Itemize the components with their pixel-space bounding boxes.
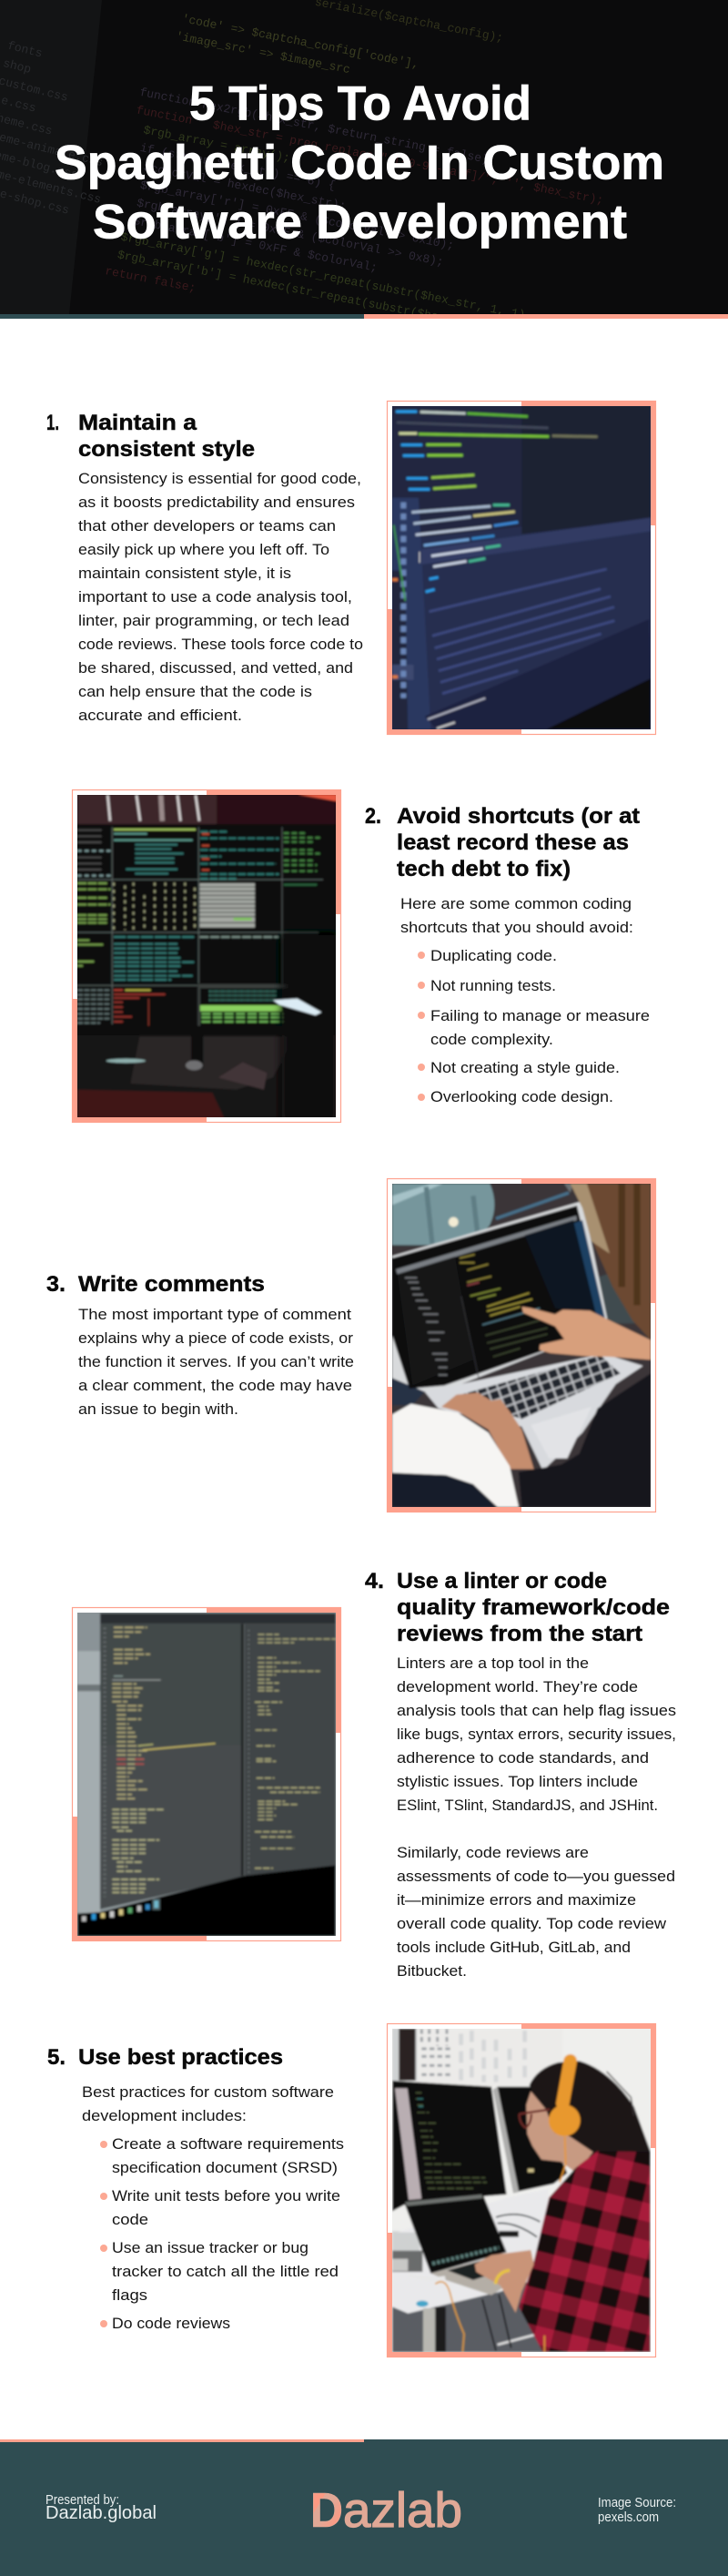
code screenshot background xyxy=(0,0,601,314)
body: tip 1: easily pick up where you left off. To xyxy=(78,541,329,558)
body: tip 4 paragraph 2: overall code quality. Top code review xyxy=(397,1915,667,1932)
presented by xyxy=(46,2493,157,2523)
code screenshot background: return false; xyxy=(104,264,197,295)
code screenshot background: fonts xyxy=(6,39,44,61)
body: tip 1: code reviews. These tools force code to xyxy=(78,636,363,653)
bullet list: tip 5: code xyxy=(112,2211,148,2228)
intro: tip 2: shortcuts that you should avoid: xyxy=(400,919,633,936)
bullet list: tip 2 xyxy=(418,947,650,1105)
code screenshot background: $colorVal = hexdec($hex_str); xyxy=(143,160,348,213)
header accent bar xyxy=(0,314,728,319)
body: tip 3: The most important type of comment xyxy=(78,1306,351,1323)
heading: tip 2 xyxy=(365,804,640,881)
body: tip 4 paragraph 1: analysis tools that can help flag issues xyxy=(397,1702,676,1719)
body: tip 1: accurate and efficient. xyxy=(78,707,242,724)
heading: tip 3: 3. xyxy=(46,1272,66,1297)
heading: tip 4: 4. xyxy=(365,1569,384,1593)
panel: tip 4 text xyxy=(365,1569,676,1980)
code screenshot background: 'code' => $captcha_config['code'], xyxy=(180,12,420,71)
heading: tip 1 xyxy=(46,411,255,462)
heading: tip 1: Maintain a xyxy=(78,411,197,435)
body: tip 3: a clear comment, the code may have xyxy=(78,1377,352,1394)
panel: tip 5 text xyxy=(47,2045,344,2332)
heading: tip 2: tech debt to fix) xyxy=(397,857,571,881)
image frame xyxy=(387,401,656,735)
code screenshot background: function hex2rgb($hex_str, $return_string = false) xyxy=(138,86,490,167)
bullet list: tip 2: Not running tests. xyxy=(430,977,556,994)
heading: tip 4: reviews from the start xyxy=(397,1622,642,1646)
heading: tip 4: quality framework/code xyxy=(397,1595,670,1620)
heading: tip 1: 1. xyxy=(46,411,59,435)
bullet list: tip 5: Do code reviews xyxy=(112,2315,230,2332)
bullet list: tip 5: tracker to catch all the little red xyxy=(112,2263,339,2280)
code screenshot background: if (strlen($hex_str) == 6) { xyxy=(139,141,337,192)
body: tip 1: that other developers or teams can xyxy=(78,517,336,535)
panel: tip 1 text xyxy=(46,411,363,724)
body: tip 3 xyxy=(78,1306,354,1418)
presented by: Presented by: xyxy=(46,2493,119,2508)
bullet list: tip 5: Use an issue tracker or bug xyxy=(112,2239,308,2256)
presented by: Dazlab.global xyxy=(46,2503,157,2523)
code screenshot background: $rgb_array = array(); xyxy=(142,123,291,165)
body: tip 4 paragraph 2: assessments of code to—you guessed xyxy=(397,1868,675,1885)
body: tip 4 paragraph 1: adherence to code standards, and xyxy=(397,1749,649,1767)
code screenshot background: $rgb_array['b'] = hexdec(str_repeat(substr($hex_str, 2, 1), 2)); xyxy=(116,248,565,348)
body: tip 3: the function it serves. If you can’t write xyxy=(78,1353,354,1370)
intro: tip 2: Here are some common coding xyxy=(400,895,632,912)
code screenshot background: function $hex_str = preg_replace("/[^0-9A-Fa-f]/", '', $hex_str); xyxy=(135,103,604,208)
body: tip 3: an issue to begin with. xyxy=(78,1400,238,1418)
body: tip 4 paragraph 2 xyxy=(397,1844,675,1980)
photo 3: people pointing at laptop xyxy=(385,1177,658,1512)
body: tip 1: can help ensure that the code is xyxy=(78,683,312,700)
bullet list: tip 5: specification document (SRSD) xyxy=(112,2159,338,2176)
intro: tip 5: Best practices for custom software xyxy=(82,2083,334,2101)
logo: Dazlab: D xyxy=(310,2483,343,2538)
code screenshot background: $rgb_array['r'] = 0xFF & ($colorVal >> 0x10); xyxy=(139,178,455,252)
body: tip 4 paragraph 1: development world. They’re code xyxy=(397,1678,638,1695)
image frame xyxy=(72,789,341,1123)
bullet list: tip 2: Failing to manage or measure xyxy=(430,1007,650,1024)
body: tip 1 xyxy=(78,470,363,724)
code screenshot background: $rgb_array['g'] = 0xFF & ($colorVal >> 0x8); xyxy=(136,196,445,270)
body: tip 1: maintain consistent style, it is xyxy=(78,565,291,582)
intro: tip 5: development includes: xyxy=(82,2107,247,2124)
heading: tip 3: Write comments xyxy=(78,1272,265,1297)
body: tip 1: as it boosts predictability and ensures xyxy=(78,494,355,511)
heading: tip 4 xyxy=(365,1569,670,1646)
body: tip 4 paragraph 1 xyxy=(397,1655,676,1814)
body: tip 4 paragraph 2: Bitbucket. xyxy=(397,1962,467,1980)
bullet list: tip 2: Not creating a style guide. xyxy=(430,1059,620,1076)
image frame xyxy=(387,2023,656,2357)
image source: pexels.com xyxy=(598,2510,659,2525)
heading: tip 2: Avoid shortcuts (or at xyxy=(397,804,640,829)
bullet list: tip 5 xyxy=(100,2135,344,2332)
intro: tip 5 xyxy=(82,2083,334,2124)
body: tip 1: important to use a code analysis tool, xyxy=(78,588,352,606)
heading: tip 1: consistent style xyxy=(78,437,255,462)
body: tip 4 paragraph 2: Similarly, code reviews are xyxy=(397,1844,589,1861)
body: tip 4 paragraph 1: stylistic issues. Top linters include xyxy=(397,1773,638,1790)
body: tip 4 paragraph 1: ESlint, TSlint, StandardJS, and JSHint. xyxy=(397,1797,658,1814)
body: tip 1: be shared, discussed, and vetted, and xyxy=(78,659,353,677)
heading: tip 5: Use best practices xyxy=(78,2045,283,2070)
body: tip 4 paragraph 1: like bugs, syntax errors, security issues, xyxy=(397,1726,676,1743)
footer xyxy=(0,2439,728,2576)
header banner xyxy=(0,0,728,319)
image source xyxy=(598,2496,676,2525)
title xyxy=(55,76,664,249)
photo 2: terminal dashboard monitor xyxy=(72,789,341,1123)
heading: tip 2: 2. xyxy=(365,804,381,829)
panel: tip 3 text xyxy=(46,1272,354,1418)
image source: Image Source: xyxy=(598,2496,676,2510)
code screenshot background: $rgb_array['g'] = hexdec(str_repeat(substr($hex_str, 1, 1), 2)); xyxy=(120,230,568,331)
body: tip 3: explains why a piece of code exists, or xyxy=(78,1329,353,1347)
photo 5: developer with orange headphones xyxy=(385,2021,658,2357)
body: tip 1: Consistency is essential for good code, xyxy=(78,470,361,487)
photo 1: code on blue editor xyxy=(382,398,662,738)
image frame xyxy=(387,1178,656,1512)
code screenshot background: $rgb_array['b'] = 0xFF & $colorVal; xyxy=(132,214,379,275)
bullet list: tip 2: Overlooking code design. xyxy=(430,1088,613,1105)
bullet list: tip 2: Duplicating code. xyxy=(430,947,557,964)
body: tip 4 paragraph 2: tools include GitHub, GitLab, and xyxy=(397,1939,631,1956)
body: tip 4 paragraph 1: Linters are a top tool in the xyxy=(397,1655,589,1672)
title: 5 Tips To Avoid xyxy=(189,76,531,131)
heading: tip 2: least record these as xyxy=(397,830,629,855)
body: tip 1: linter, pair programming, or tech lead xyxy=(78,612,349,629)
heading: tip 5: 5. xyxy=(47,2045,66,2070)
title: Spaghetti Code In Custom xyxy=(55,137,664,189)
title: Software Development xyxy=(93,195,627,249)
photo 4: grey code editor screen xyxy=(72,1607,341,1942)
code screenshot background: shop xyxy=(2,56,33,76)
bullet list: tip 5: Create a software requirements xyxy=(112,2135,344,2153)
bullet list: tip 5: flags xyxy=(112,2286,147,2304)
bullet list: tip 5: Write unit tests before you write xyxy=(112,2187,340,2204)
panel: tip 2 text xyxy=(365,804,650,1105)
image frame xyxy=(72,1607,341,1941)
code screenshot background: 'image_src' => $image_src xyxy=(175,29,351,76)
body: tip 4 paragraph 2: it—minimize errors and maximize xyxy=(397,1891,636,1909)
heading: tip 4: Use a linter or code xyxy=(397,1569,607,1593)
intro: tip 2 xyxy=(400,895,633,936)
logo: Dazlab: azlab xyxy=(343,2483,462,2538)
bullet list: tip 2: code complexity. xyxy=(430,1031,553,1048)
